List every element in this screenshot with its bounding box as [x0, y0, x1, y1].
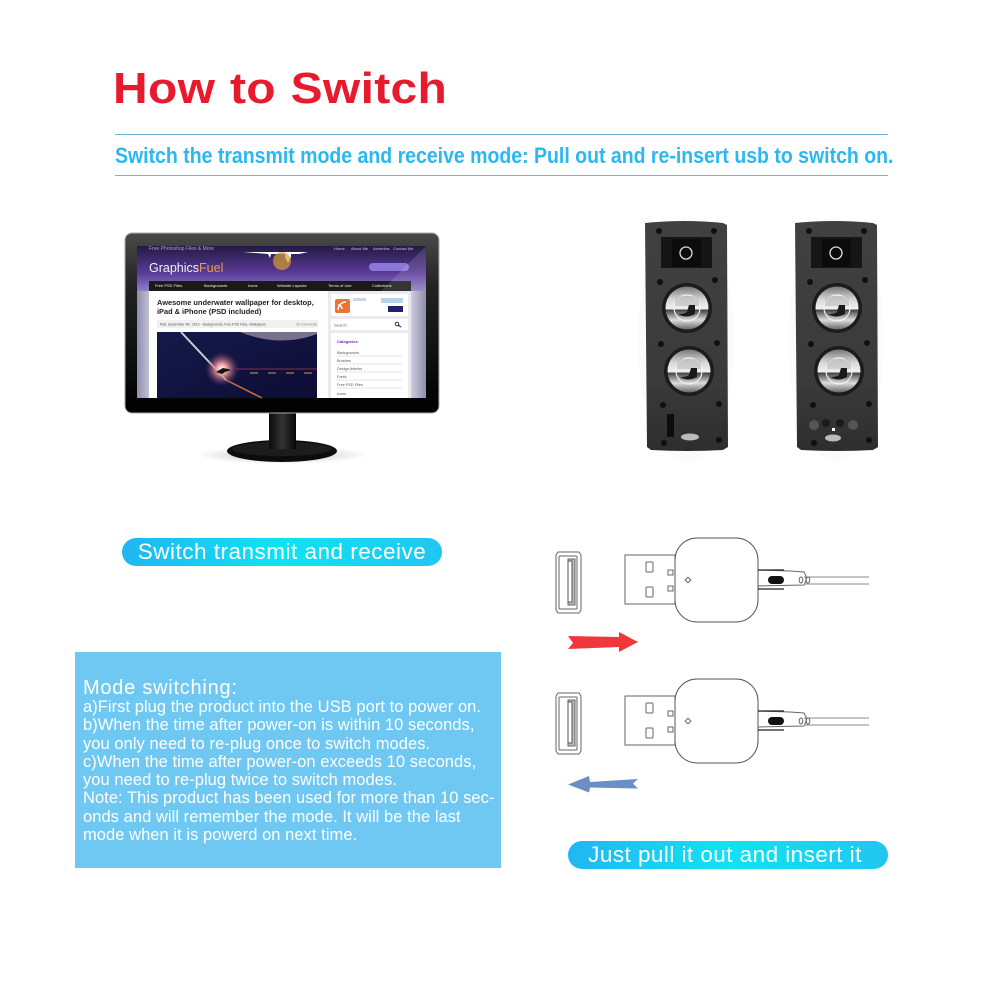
screen: Icons [337, 392, 346, 396]
panel body text: you need to re-plug twice to switch modes. [83, 771, 397, 789]
screen: Backgrounds [337, 351, 359, 355]
screen: Collections [372, 283, 392, 288]
screen: Design Articles [337, 367, 362, 371]
screen: Free PSD Files [155, 283, 182, 288]
panel body text: mode when it is powerd on next time. [83, 826, 357, 844]
arrow: insert (blue) [568, 776, 638, 792]
screen: Terms of Use [328, 283, 352, 288]
panel body text [83, 698, 494, 844]
screen: Website Layouts [277, 283, 306, 288]
screen: Backgrounds [204, 283, 227, 288]
panel body text: c)When the time after power-on exceeds 10 seconds, [83, 753, 476, 771]
screen: Contact Me [393, 246, 414, 251]
screen: Categories [337, 339, 358, 344]
screen [137, 246, 426, 398]
panel: mode switching instructions [75, 652, 501, 868]
screen: Icons [248, 283, 258, 288]
screen: Fonts [337, 375, 347, 379]
panel body text: Note: This product has been used for more than 10 sec- [83, 789, 494, 807]
screen: Brushes [337, 359, 351, 363]
screen: Awesome underwater wallpaper for desktop, [157, 298, 314, 307]
label: switch transmit and receive: Switch transmit and receive [138, 539, 426, 564]
screen: Free Photoshop Files & More [149, 246, 214, 252]
panel body text: a)First plug the product into the USB port to power on. [83, 698, 481, 716]
screen: About Me [351, 246, 369, 251]
diagram: USB dongle pull out and insert [556, 538, 869, 792]
panel body text: onds and will remember the mode. It will be the last [83, 808, 461, 826]
screen: GraphicsFuel [149, 261, 223, 275]
title: How to Switch [113, 64, 447, 113]
screen: Advertise [373, 246, 390, 251]
panel heading: Mode switching: [83, 677, 238, 699]
label: just pull it out and insert it: Just pull it out and insert it [588, 842, 862, 867]
screen: iPad & iPhone (PSD included) [157, 307, 262, 316]
screen: 26 Comments [296, 322, 317, 326]
panel body text: you only need to re-plug once to switch modes. [83, 735, 430, 753]
subtitle: Switch the transmit mode and receive mode: Pull out and re-insert usb to switch on. [115, 143, 893, 168]
panel body text: b)When the time after power-on is within 10 seconds, [83, 716, 474, 734]
arrow: pull out (red) [568, 632, 638, 652]
screen: Free PSD Files [337, 383, 363, 387]
screen: Home [334, 246, 345, 251]
icon: computer monitor [124, 232, 440, 463]
screen: Search [334, 322, 347, 328]
icon: pair of speakers [645, 221, 878, 451]
screen: Rafi, September 4th, 2010 · Backgrounds, Free PSD Files, Wallpapers [160, 322, 266, 326]
